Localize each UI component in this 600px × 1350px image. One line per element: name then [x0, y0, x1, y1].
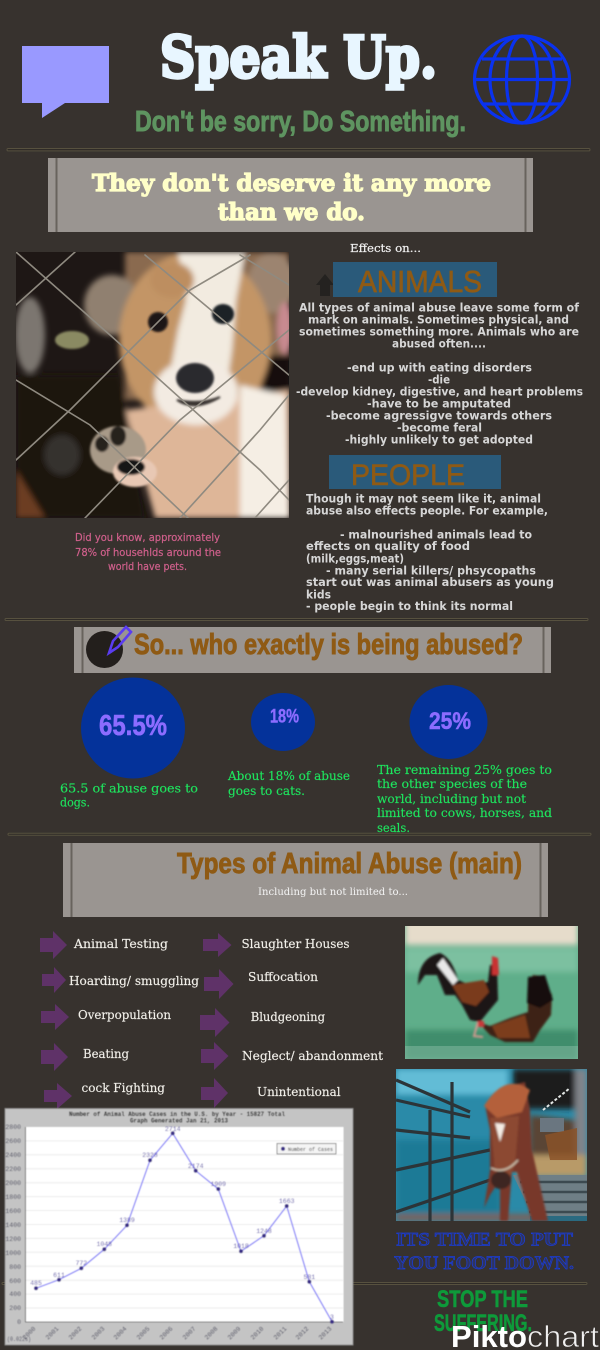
- data values: 2714: [165, 1126, 181, 1133]
- icon: black circle with pencil: [86, 627, 131, 668]
- stat: other species: 25%: [429, 708, 471, 735]
- y axis labels: 1600: [5, 1208, 21, 1215]
- list: abuse types, right column: Unintentional: [257, 1085, 341, 1099]
- heading: people: [329, 455, 501, 492]
- x axis labels: 2010: [249, 1325, 265, 1341]
- banner: they don't deserve it: [48, 158, 533, 232]
- stat: dogs: dogs.: [60, 796, 90, 810]
- data values: 1048: [96, 1241, 112, 1248]
- text block: effects on people: Though it may not seem like it, animal: [306, 492, 541, 506]
- x axis labels: 2011: [272, 1325, 288, 1341]
- stat: other species: the other species of the: [377, 777, 527, 791]
- data values: 2328: [142, 1152, 158, 1159]
- stat: dogs: 65.5 of abuse goes to: [60, 782, 198, 796]
- text block: effects on people: kids: [306, 587, 331, 601]
- text block: effects on animals: sometimes something more. Animals who are: [299, 325, 579, 339]
- data points: [34, 1131, 334, 1324]
- banner: they don't deserve it: They don't deserve it any more: [92, 170, 491, 197]
- stat: other species: world, including but not: [377, 792, 526, 806]
- x axis labels: 2008: [203, 1325, 219, 1341]
- logo: piktochart: [451, 1319, 599, 1350]
- data values: 1389: [119, 1217, 135, 1224]
- stat: dogs: 65.5%: [99, 710, 167, 742]
- y axis labels: 2000: [5, 1180, 21, 1187]
- y axis labels: 1200: [5, 1236, 21, 1243]
- list: abuse types, left column: Animal Testing: [73, 937, 168, 951]
- x axis labels: 2005: [135, 1325, 151, 1341]
- y axis labels: 1800: [5, 1194, 21, 1201]
- stat: other species: limited to cows, horses, and: [377, 806, 552, 820]
- stat: cats: [227, 693, 350, 798]
- list: abuse types, left column: Hoarding/ smuggling: [69, 974, 199, 988]
- stat: other species: The remaining 25% goes to: [377, 763, 552, 777]
- caption: did you know: [75, 532, 221, 573]
- photo: horse in transport trailer: [396, 1069, 587, 1221]
- y axis labels: 600: [9, 1278, 21, 1285]
- subtitle: Don't be sorry, Do Something.: [135, 106, 466, 138]
- text block: effects on animals: -die: [428, 373, 450, 387]
- list: abuse types, right column: [200, 933, 383, 1108]
- y axis labels: 0: [17, 1319, 21, 1326]
- banner: types of animal abuse: Types of Animal Abuse (main): [177, 848, 522, 880]
- chart title: [69, 1111, 285, 1124]
- call to action: put your foot down: [394, 1230, 574, 1274]
- stat: other species: seals.: [377, 821, 410, 835]
- text block: effects on people: - many serial killers/ phsycopaths: [326, 563, 536, 577]
- text block: effects on people: start out was animal abusers as young: [306, 575, 554, 589]
- text block: effects on animals: -have to be amputated: [367, 397, 511, 411]
- x axis labels: 2009: [226, 1325, 242, 1341]
- list: abuse types, left column: [40, 931, 199, 1109]
- banner: who is being abused: So... who exactly is being abused?: [134, 629, 523, 661]
- text block: effects on people: - people begin to think its normal: [306, 599, 513, 613]
- list: abuse types, right column: Suffocation: [248, 970, 318, 984]
- y axis labels: 1000: [5, 1250, 21, 1257]
- data values: [30, 1126, 334, 1321]
- text block: effects on people: (milk,eggs,meat): [306, 551, 404, 565]
- text block: effects on animals: -become agressigve towards others: [326, 408, 552, 422]
- caption: did you know: Did you know, approximately: [75, 532, 220, 544]
- text block: effects on people: abuse also effects people. For example,: [306, 503, 548, 517]
- photo: fighting roosters: [405, 920, 578, 1060]
- line chart: abuse cases by year: [5, 1108, 353, 1345]
- x axis labels: 2000: [21, 1325, 37, 1341]
- banner: they don't deserve it: than we do.: [218, 199, 365, 226]
- list: abuse types, left column: Beating: [83, 1047, 129, 1061]
- x axis labels: 2013: [317, 1325, 333, 1341]
- banner: who is being abused: [74, 627, 551, 673]
- list: abuse types, right column: Bludgeoning: [251, 1010, 325, 1024]
- data values: 2174: [188, 1163, 204, 1170]
- chart footnote: (0.022s): [7, 1336, 31, 1343]
- banner: types of animal abuse: [63, 843, 548, 917]
- data values: 485: [30, 1280, 42, 1287]
- data values: 1018: [233, 1243, 249, 1250]
- stat: other species: [377, 685, 552, 835]
- data values: 1663: [279, 1198, 295, 1205]
- caption: did you know: 78% of househlds around the: [75, 547, 221, 559]
- stat: cats: goes to cats.: [228, 784, 305, 798]
- call to action: stop the suffering: SUFFERING.: [434, 1310, 532, 1337]
- icon: up arrow: [316, 274, 334, 296]
- list: abuse types, right column: Slaughter Houses: [242, 937, 350, 951]
- y axis labels: 2400: [5, 1152, 21, 1159]
- y axis labels: 1400: [5, 1222, 21, 1229]
- stat: cats: About 18% of abuse: [227, 769, 350, 783]
- list: abuse types, right column: Neglect/ abandonment: [242, 1049, 383, 1063]
- text block: effects on animals: -end up with eating disorders: [347, 361, 532, 375]
- text block: effects on animals: All types of animal abuse leave some form of: [299, 301, 580, 315]
- text block: effects on people: - malnourished animals lead to: [340, 527, 532, 541]
- y axis labels: 200: [9, 1305, 21, 1312]
- title: Speak Up.: [160, 24, 437, 91]
- heading: people: PEOPLE: [351, 459, 465, 492]
- x axis labels: 2007: [181, 1325, 197, 1341]
- stat: dogs: [60, 678, 198, 810]
- text block: effects on people: effects on quality of food: [306, 539, 470, 553]
- chart legend: [277, 1144, 336, 1154]
- photo: puppy behind chain-link fence: [15, 252, 296, 520]
- data values: 581: [303, 1274, 315, 1281]
- heading: animals: ANIMALS: [358, 264, 482, 299]
- data values: 611: [53, 1272, 65, 1279]
- text block: effects on animals: abused often....: [392, 337, 486, 351]
- list: abuse types, left column: cock Fighting: [82, 1081, 165, 1095]
- y axis labels: 800: [9, 1264, 21, 1271]
- data values: 1248: [256, 1228, 272, 1235]
- data values: 3: [330, 1314, 334, 1321]
- text block: effects on animals: -develop kidney, digestive, and heart problems: [296, 385, 583, 399]
- data values: 772: [75, 1260, 87, 1267]
- x axis labels: 2001: [44, 1325, 60, 1341]
- y axis labels: [5, 1124, 21, 1326]
- y axis labels: 2800: [5, 1124, 21, 1131]
- x axis labels: 2002: [67, 1325, 83, 1341]
- call to action: put your foot down: YOU FOOT DOWN.: [394, 1253, 574, 1274]
- call to action: put your foot down: ITS TIME TO PUT: [396, 1230, 573, 1251]
- x axis labels: 2003: [90, 1325, 106, 1341]
- y axis labels: 400: [9, 1291, 21, 1298]
- banner: types of animal abuse: Including but not limited to...: [258, 886, 408, 898]
- call to action: stop the suffering: [434, 1286, 532, 1337]
- label: effects on: Effects on...: [350, 242, 421, 255]
- icon: globe: [474, 36, 570, 123]
- text block: effects on people: [306, 492, 554, 613]
- data values: 1909: [210, 1181, 226, 1188]
- call to action: stop the suffering: STOP THE: [437, 1286, 528, 1313]
- x axis labels: 2006: [158, 1325, 174, 1341]
- text block: effects on animals: [296, 301, 583, 446]
- x axis labels: 2004: [112, 1325, 128, 1341]
- caption: did you know: world have pets.: [108, 561, 187, 573]
- list: abuse types, left column: Overpopulation: [78, 1008, 171, 1022]
- stat: cats: 18%: [270, 707, 299, 728]
- data line: [36, 1133, 332, 1322]
- text block: effects on animals: -highly unlikely to get adopted: [345, 432, 533, 446]
- x axis labels: 2012: [294, 1325, 310, 1341]
- text block: effects on animals: mark on animals. Sometimes physical, and: [308, 312, 569, 326]
- chart legend: Number of Cases: [288, 1146, 333, 1153]
- y axis labels: 2600: [5, 1138, 21, 1145]
- chart title: Number of Animal Abuse Cases in the U.S. by Year - 15827 Total: [69, 1111, 285, 1118]
- text block: effects on animals: -become feral: [397, 421, 482, 435]
- icon: speech bubble: [22, 46, 109, 118]
- chart title: Graph Generated Jan 21, 2013: [130, 1118, 228, 1124]
- x axis labels: [21, 1325, 333, 1341]
- y axis labels: 2200: [5, 1166, 21, 1173]
